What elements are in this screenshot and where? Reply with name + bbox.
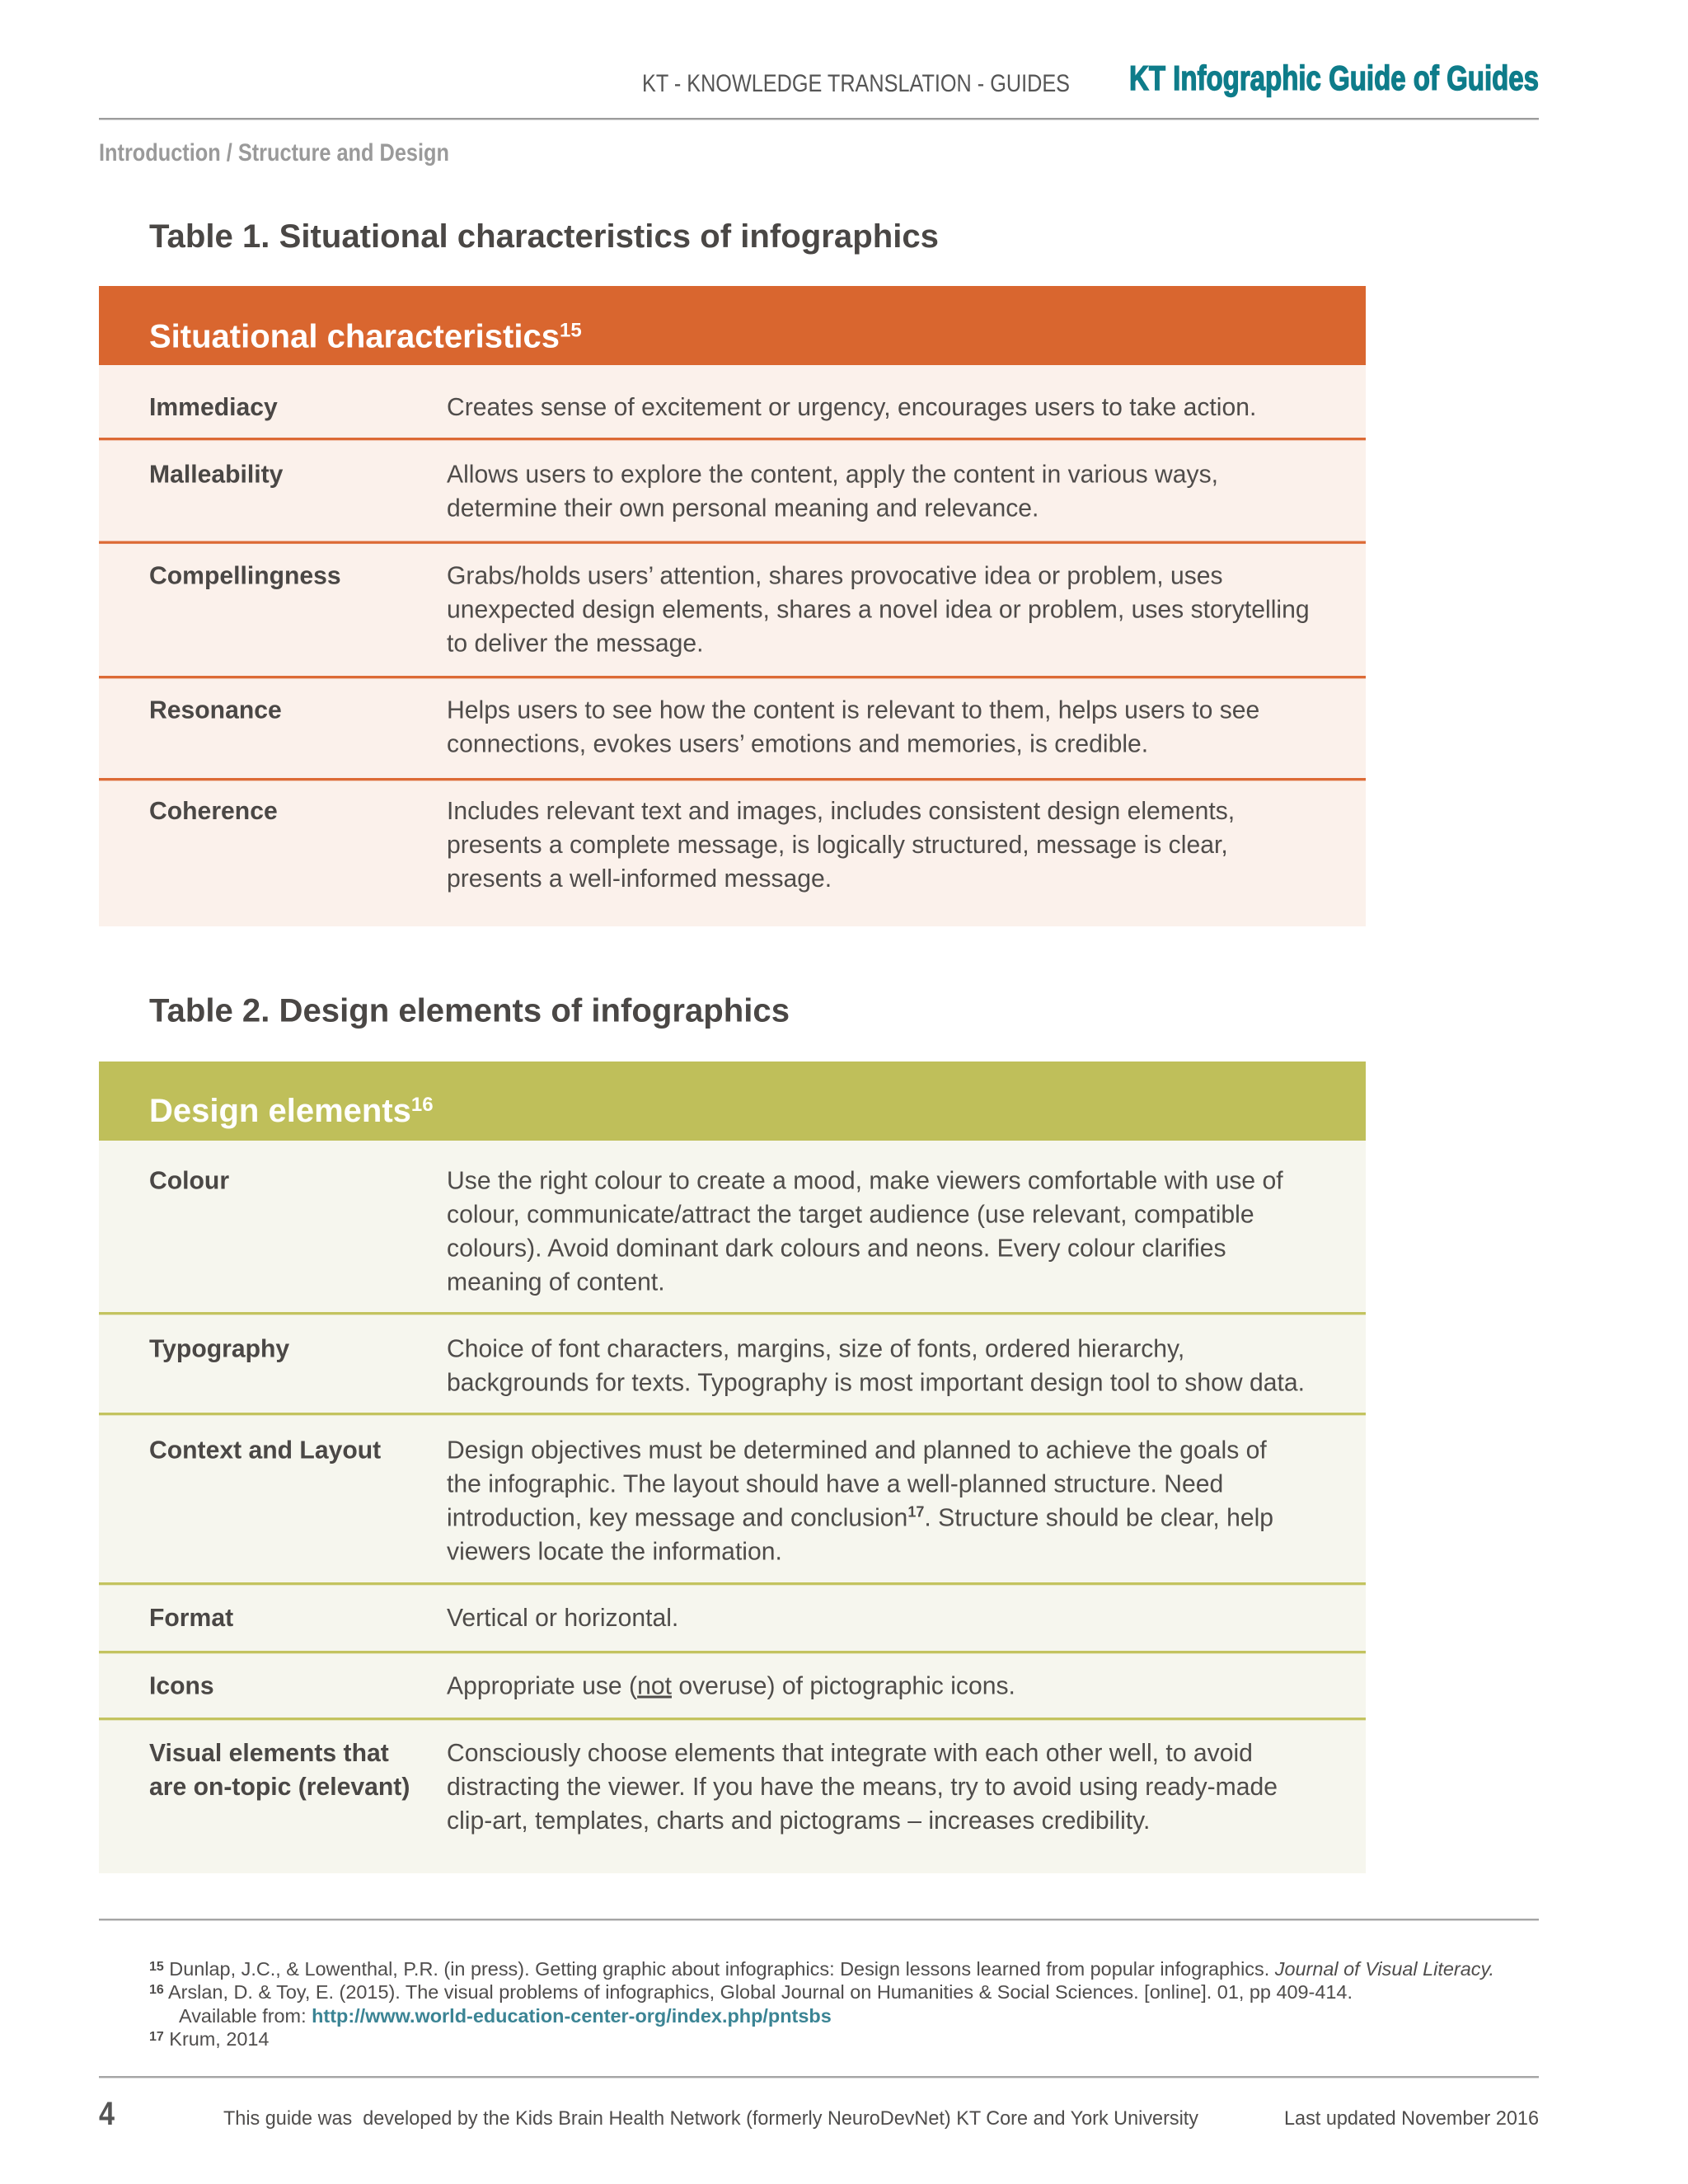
table 2 title: Table 2. Design elements of infographics (149, 992, 790, 1029)
table 2 header band: Design elements (149, 1093, 411, 1129)
row: typography: Choice of font characters, margins, size of fonts, ordered hierarchy, (447, 1335, 1184, 1363)
row: colour: colour, communicate/attract the target audience (use relevant, compatible (447, 1202, 1254, 1228)
row: format: Vertical or horizontal. (447, 1605, 678, 1632)
row: colour: colours). Avoid dominant dark colours and neons. Every colour clarifies (447, 1235, 1226, 1263)
row: icons: Appropriate use (not overuse) of pictographic icons. (447, 1673, 1015, 1699)
row: compellingness: unexpected design elements, shares a novel idea or problem, uses storytelling (447, 597, 1310, 623)
row: colour (149, 1167, 1283, 1296)
footnotes: Dunlap, J.C., & Lowenthal, P.R. (in press). Getting graphic about infographics: Design lessons learned from popular infographics. (164, 1958, 1275, 1980)
row: visual elements: Consciously choose elements that integrate with each other well, to avoid (447, 1740, 1253, 1767)
row: compellingness (149, 562, 1310, 658)
row: format: Format (149, 1605, 233, 1632)
row: resonance: connections, evokes users’ emotions and memories, is credible. (447, 730, 1148, 758)
row: coherence: Coherence (149, 798, 278, 825)
footnotes: Available from: http://www.world-education-center-org/index.php/pntsbs (179, 2005, 832, 2027)
row: format (149, 1605, 678, 1632)
row: colour: Use the right colour to create a mood, make viewers comfortable with use of (447, 1167, 1283, 1195)
row: malleability: Allows users to explore the content, apply the content in various ways, (447, 462, 1218, 488)
row: context and layout (149, 1437, 1273, 1566)
footnotes: 15 (149, 1960, 164, 1974)
row: context and layout: 17 (907, 1503, 924, 1520)
footnotes: Journal of Visual Literacy. (1274, 1958, 1494, 1980)
row: immediacy: Immediacy (149, 394, 278, 421)
row: colour: meaning of content. (447, 1269, 665, 1296)
footnotes: Arslan, D. & Toy, E. (2015). The visual problems of infographics, Global Journal on Humanities & Social Sciences. [online]. 01, pp 409-414. (164, 1981, 1353, 2003)
row: colour: Colour (149, 1167, 229, 1195)
row: icons: Icons (149, 1673, 214, 1699)
table 2 header band: 16 (411, 1094, 434, 1116)
row: compellingness: to deliver the message. (447, 630, 703, 658)
row: coherence (149, 798, 1235, 893)
row: coherence: Includes relevant text and images, includes consistent design elements, (447, 798, 1235, 825)
row: resonance (149, 697, 1259, 758)
row: context and layout: viewers locate the information. (447, 1538, 782, 1566)
row: typography: Typography (149, 1335, 289, 1363)
panel: design elements table (99, 1062, 1366, 1873)
last updated: Last updated November 2016 (1284, 2107, 1539, 2130)
row: typography: backgrounds for texts. Typography is most important design tool to show data. (447, 1370, 1305, 1396)
table 2 header band (99, 1062, 1366, 1141)
page header (99, 59, 1539, 120)
table 1 header band (99, 286, 1366, 365)
row: visual elements: Visual elements that (149, 1740, 389, 1767)
row: compellingness: Grabs/holds users’ attention, shares provocative idea or problem, uses (447, 562, 1223, 590)
row: visual elements: are on-topic (relevant) (149, 1774, 410, 1801)
row: context and layout: Design objectives must be determined and planned to achieve the goals of (447, 1437, 1267, 1464)
footer credit: This guide was developed by the Kids Brain Health Network (formerly NeuroDevNet) KT Core and York University (223, 2107, 1198, 2130)
row: visual elements: distracting the viewer. If you have the means, try to avoid using ready-made (447, 1774, 1278, 1801)
row: resonance: Resonance (149, 697, 282, 724)
table 1 header band: 15 (560, 320, 582, 341)
header title: KT Infographic Guide of Guides (1129, 59, 1539, 97)
row: immediacy: Creates sense of excitement or urgency, encourages users to take action. (447, 394, 1256, 421)
section breadcrumb: Introduction / Structure and Design (99, 139, 449, 166)
footnotes: Krum, 2014 (164, 2028, 269, 2050)
header guide label: KT - KNOWLEDGE TRANSLATION - GUIDES (642, 70, 1070, 97)
row: context and layout: the infographic. The layout should have a well-planned structure. Need (447, 1470, 1223, 1498)
footnotes: 16 (149, 1983, 164, 1997)
row: visual elements: clip-art, templates, charts and pictograms – increases credibility. (447, 1807, 1150, 1835)
page footer (99, 2096, 1539, 2132)
row: malleability: Malleability (149, 462, 284, 488)
footnotes: 17 (149, 2030, 164, 2044)
table 1 title: Table 1. Situational characteristics of infographics (149, 218, 939, 255)
row: malleability: determine their own personal meaning and relevance. (447, 494, 1039, 523)
footnotes (149, 1958, 1494, 2050)
row: visual elements (149, 1740, 1278, 1835)
page number: 4 (99, 2096, 115, 2132)
row: context and layout: Context and Layout (149, 1437, 381, 1464)
panel: situational characteristics table (99, 286, 1366, 926)
row: coherence: presents a well-informed message. (447, 865, 832, 893)
row: context and layout: introduction, key message and conclusion (447, 1505, 907, 1531)
row: context and layout: . Structure should be clear, help (924, 1505, 1273, 1531)
row: compellingness: Compellingness (149, 562, 341, 590)
row: coherence: presents a complete message, is logically structured, message is clear, (447, 832, 1228, 859)
table 1 header band: Situational characteristics (149, 318, 560, 354)
row: malleability (149, 462, 1218, 523)
row: icons (149, 1673, 1015, 1699)
row: typography (149, 1335, 1305, 1396)
row: resonance: Helps users to see how the content is relevant to them, helps users to see (447, 697, 1259, 724)
